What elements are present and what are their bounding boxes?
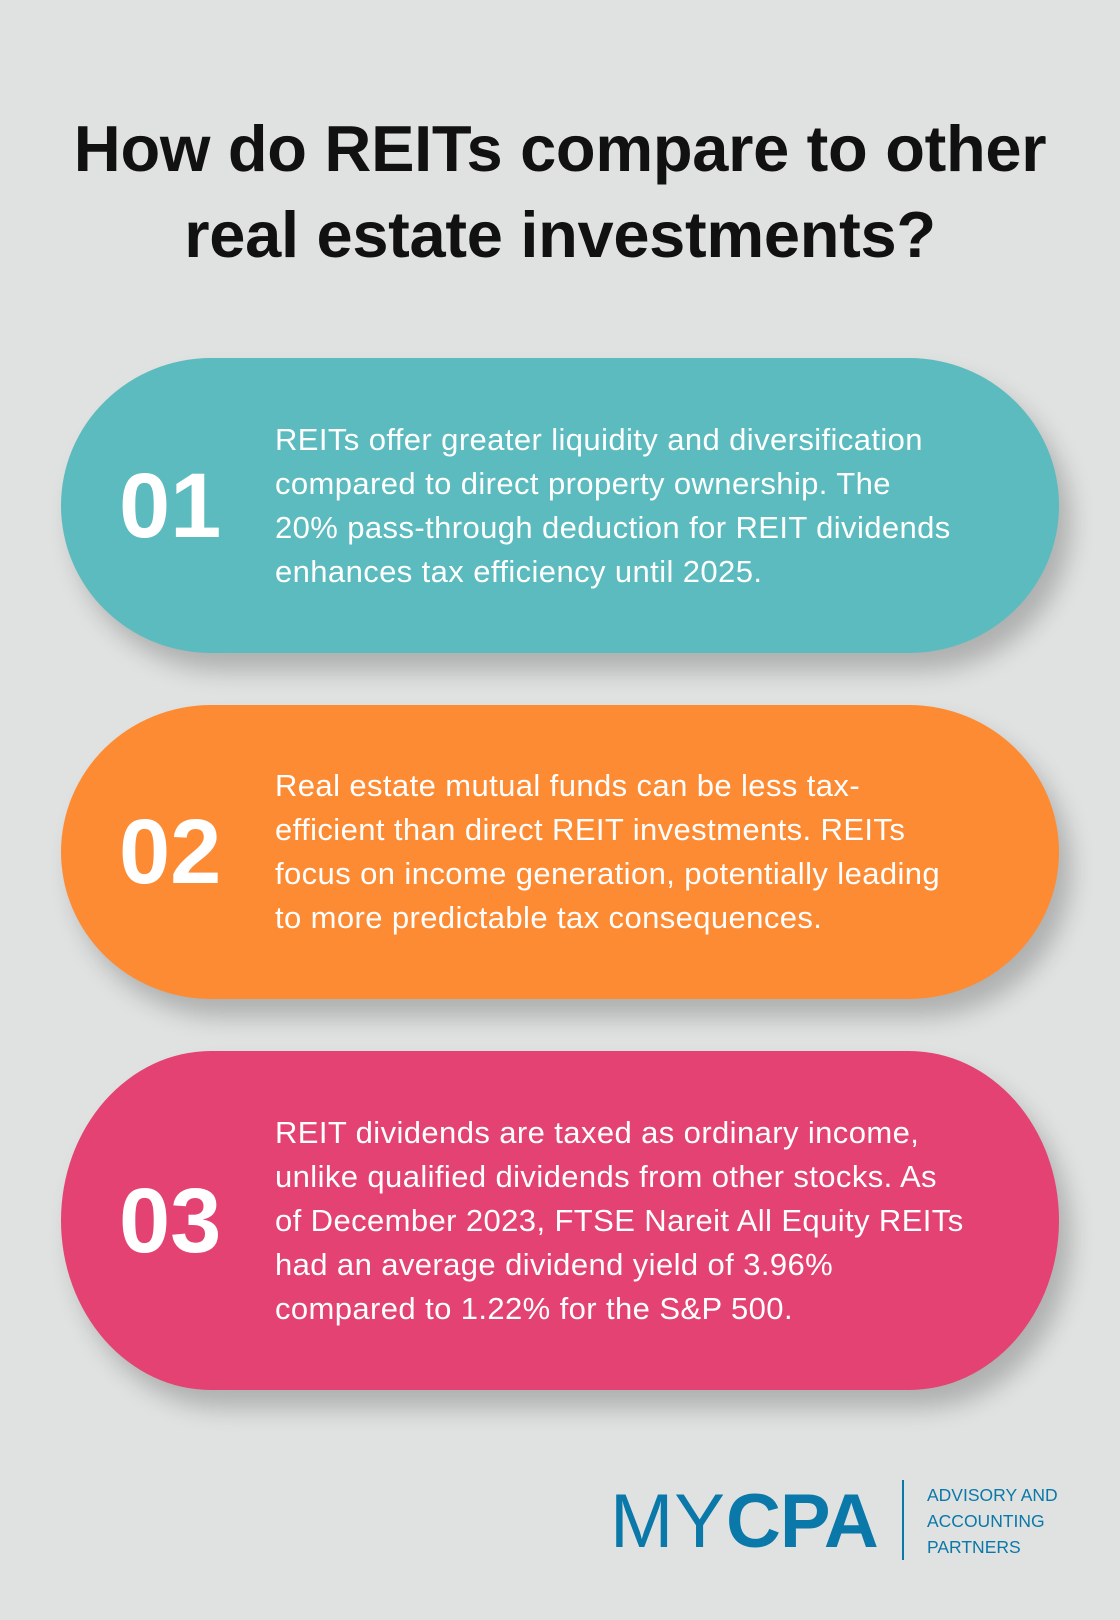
text 02: Real estate mutual funds can be less tax-: [275, 768, 860, 803]
logo tagline: [927, 1485, 1058, 1557]
text 03: of December 2023, FTSE Nareit All Equity REITs: [275, 1202, 964, 1238]
text 01: 20% pass-through deduction for REIT dividends: [275, 510, 951, 544]
title: [74, 112, 1046, 271]
text 01: REITs offer greater liquidity and diversification: [275, 422, 923, 456]
number 01: 01: [119, 454, 221, 556]
panel: card 02: [61, 705, 1059, 999]
panel: card 01: [61, 358, 1059, 653]
number 02: 02: [119, 801, 221, 903]
panel: card 03: [61, 1051, 1059, 1390]
text 02: to more predictable tax consequences.: [275, 900, 822, 935]
number 03: 03: [119, 1170, 221, 1272]
logo divider: [902, 1480, 904, 1560]
title: real estate investments?: [184, 198, 936, 271]
text 01: [275, 422, 951, 588]
text 03: compared to 1.22% for the S&P 500.: [275, 1290, 793, 1326]
text 03: had an average dividend yield of 3.96%: [275, 1246, 833, 1282]
text 03: [275, 1114, 964, 1326]
logo tagline: PARTNERS: [927, 1537, 1021, 1557]
logo tagline: ACCOUNTING: [927, 1511, 1045, 1531]
logo tagline: ADVISORY AND: [927, 1485, 1058, 1505]
text 03: REIT dividends are taxed as ordinary income,: [275, 1114, 919, 1150]
text 02: focus on income generation, potentially leading: [275, 856, 940, 891]
logo: [610, 1479, 1058, 1564]
title: How do REITs compare to other: [74, 112, 1046, 185]
text 02: efficient than direct REIT investments. REITs: [275, 812, 905, 847]
text 01: compared to direct property ownership. The: [275, 466, 891, 500]
text 03: unlike qualified dividends from other stocks. As: [275, 1158, 937, 1194]
logo wordmark: MYCPA: [610, 1479, 878, 1564]
text 01: enhances tax efficiency until 2025.: [275, 554, 762, 588]
text 02: [275, 768, 940, 935]
